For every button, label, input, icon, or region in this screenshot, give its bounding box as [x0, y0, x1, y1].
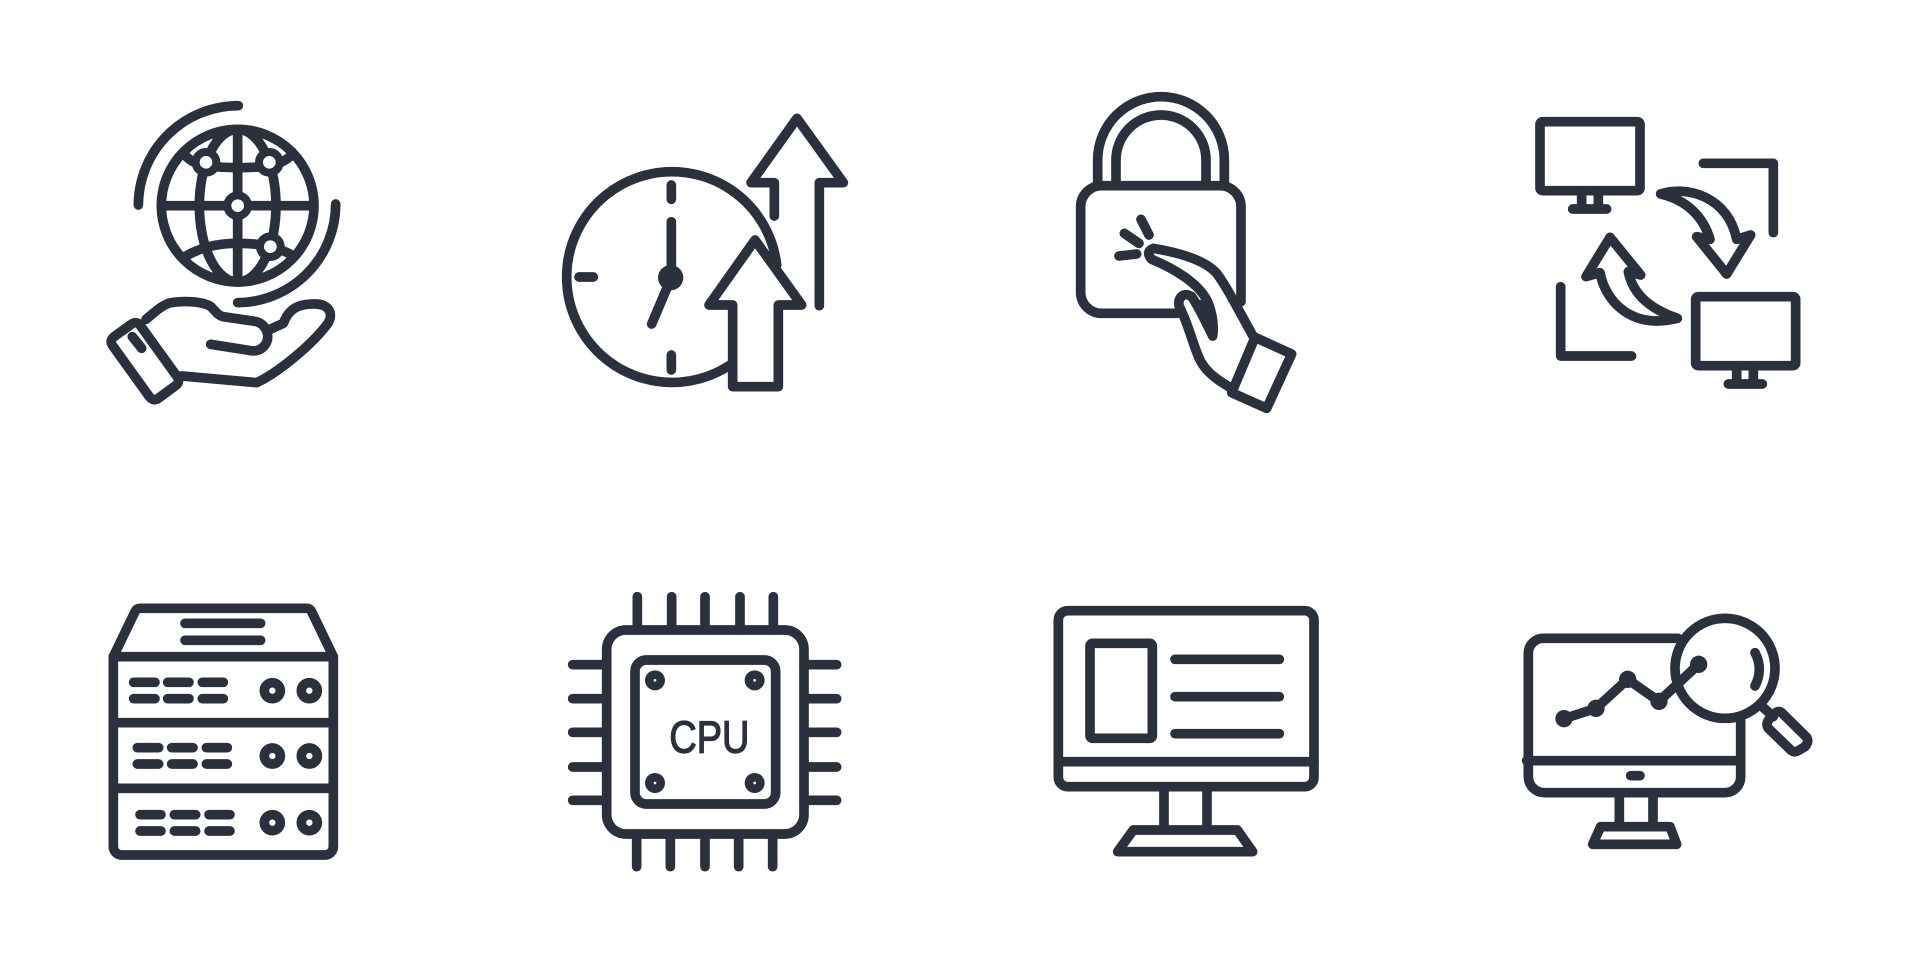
bottom monitor [1696, 297, 1796, 384]
icon: clock with rising arrows [567, 118, 843, 387]
clock face [567, 172, 777, 382]
icon: two monitors syncing [1540, 122, 1796, 384]
status lights [264, 683, 317, 831]
arrow down [1661, 191, 1751, 274]
text lines [1175, 659, 1279, 734]
line chart [1555, 656, 1707, 727]
rack body [113, 657, 333, 855]
cuff [1232, 337, 1292, 408]
icon: desktop monitor with content [1058, 611, 1314, 852]
touch sparks [1119, 219, 1149, 256]
icon: CPU chip [573, 597, 837, 867]
magnifier [1675, 618, 1808, 752]
row two vents [137, 748, 227, 764]
rack roof [113, 608, 333, 657]
monitor stand [1118, 787, 1253, 852]
hand [1149, 248, 1253, 388]
clock ticks and hands [579, 185, 671, 370]
core screws [645, 670, 765, 793]
back arrow [751, 118, 843, 306]
CPU label: CPU [669, 711, 749, 762]
globe [161, 129, 314, 282]
top monitor [1540, 122, 1640, 209]
chip core [635, 660, 776, 804]
lock body [1081, 186, 1241, 313]
orbit arcs [138, 106, 336, 303]
chip pins [573, 597, 837, 867]
image placeholder [1090, 643, 1152, 738]
icon: padlock touched by hand [1081, 97, 1292, 408]
arrow up [1586, 237, 1677, 321]
monitor frame [1527, 638, 1741, 793]
icon: globe network held in hand [111, 106, 336, 400]
front arrow [709, 240, 802, 387]
icon: server rack [113, 608, 333, 855]
monitor frame [1058, 611, 1314, 787]
icon: monitor analytics with magnifier [1527, 618, 1808, 844]
hand [146, 302, 268, 351]
row one vents [134, 682, 223, 699]
network nodes [196, 152, 281, 257]
row three vents [140, 815, 230, 831]
shackle [1098, 97, 1224, 183]
monitor stand [1593, 793, 1677, 844]
chip body [607, 630, 804, 834]
monitor chin line [1058, 747, 1314, 776]
clock centre [658, 265, 683, 290]
cuff [111, 323, 179, 400]
corner brackets [1561, 163, 1773, 356]
